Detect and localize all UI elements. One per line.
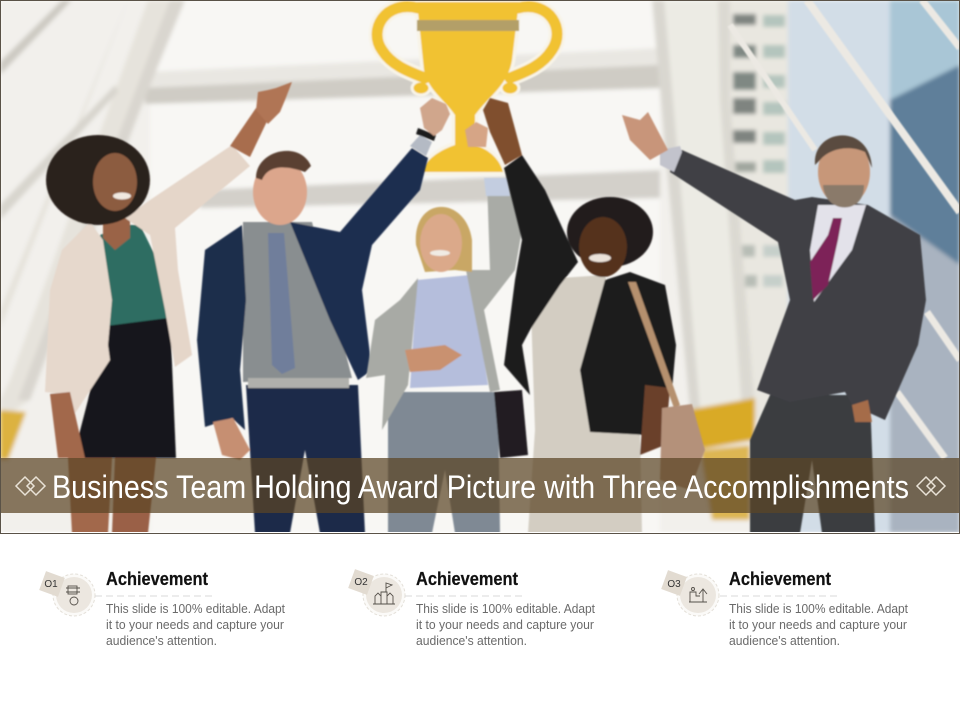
icon: numbered badge with person and arrow	[661, 570, 719, 616]
divider	[720, 595, 838, 597]
heading: Achievement	[106, 569, 208, 589]
body text: it to your needs and capture your	[106, 618, 284, 632]
body text: This slide is 100% editable. Adapt	[106, 602, 286, 616]
photo background: bridge and buildings	[0, 0, 960, 533]
body text: This slide is 100% editable. Adapt	[416, 602, 596, 616]
photo background: steel cables	[730, 0, 960, 458]
icon: left double diamonds	[16, 477, 45, 495]
heading: Achievement	[416, 569, 518, 589]
body text: audience's attention.	[106, 634, 217, 648]
person 2: man in navy blazer	[197, 98, 450, 533]
body text: audience's attention.	[416, 634, 527, 648]
person 5: bearded man in grey suit	[622, 112, 926, 533]
person 3: blonde woman in grey blazer	[366, 122, 528, 533]
photo: business team holding a trophy	[0, 0, 960, 533]
body text: it to your needs and capture your	[416, 618, 594, 632]
body text: This slide is 100% editable. Adapt	[729, 602, 909, 616]
person 1: woman in beige blazer	[45, 82, 292, 533]
accomplishment 2	[348, 569, 596, 648]
accomplishment 1	[39, 569, 286, 648]
icon: numbered badge with person and arrow: O3	[667, 579, 681, 590]
divider	[95, 595, 214, 597]
icon: numbered badge with medal	[39, 571, 95, 616]
icon: numbered badge with team and flag	[348, 569, 405, 616]
photo border	[0, 0, 960, 534]
icon: numbered badge with medal: O1	[44, 579, 58, 590]
heading: Achievement	[729, 569, 831, 589]
body text: it to your needs and capture your	[729, 618, 907, 632]
body text	[416, 602, 596, 648]
icon: right double diamonds	[917, 477, 945, 495]
accomplishment 3	[661, 569, 909, 648]
icon: numbered badge with team and flag: O2	[354, 577, 368, 588]
trophy picture	[377, 2, 557, 172]
body text	[106, 602, 286, 648]
person 4: woman in black jacket	[483, 98, 705, 533]
divider	[405, 595, 524, 597]
title banner	[1, 458, 959, 513]
body text: audience's attention.	[729, 634, 840, 648]
body text	[729, 602, 909, 648]
